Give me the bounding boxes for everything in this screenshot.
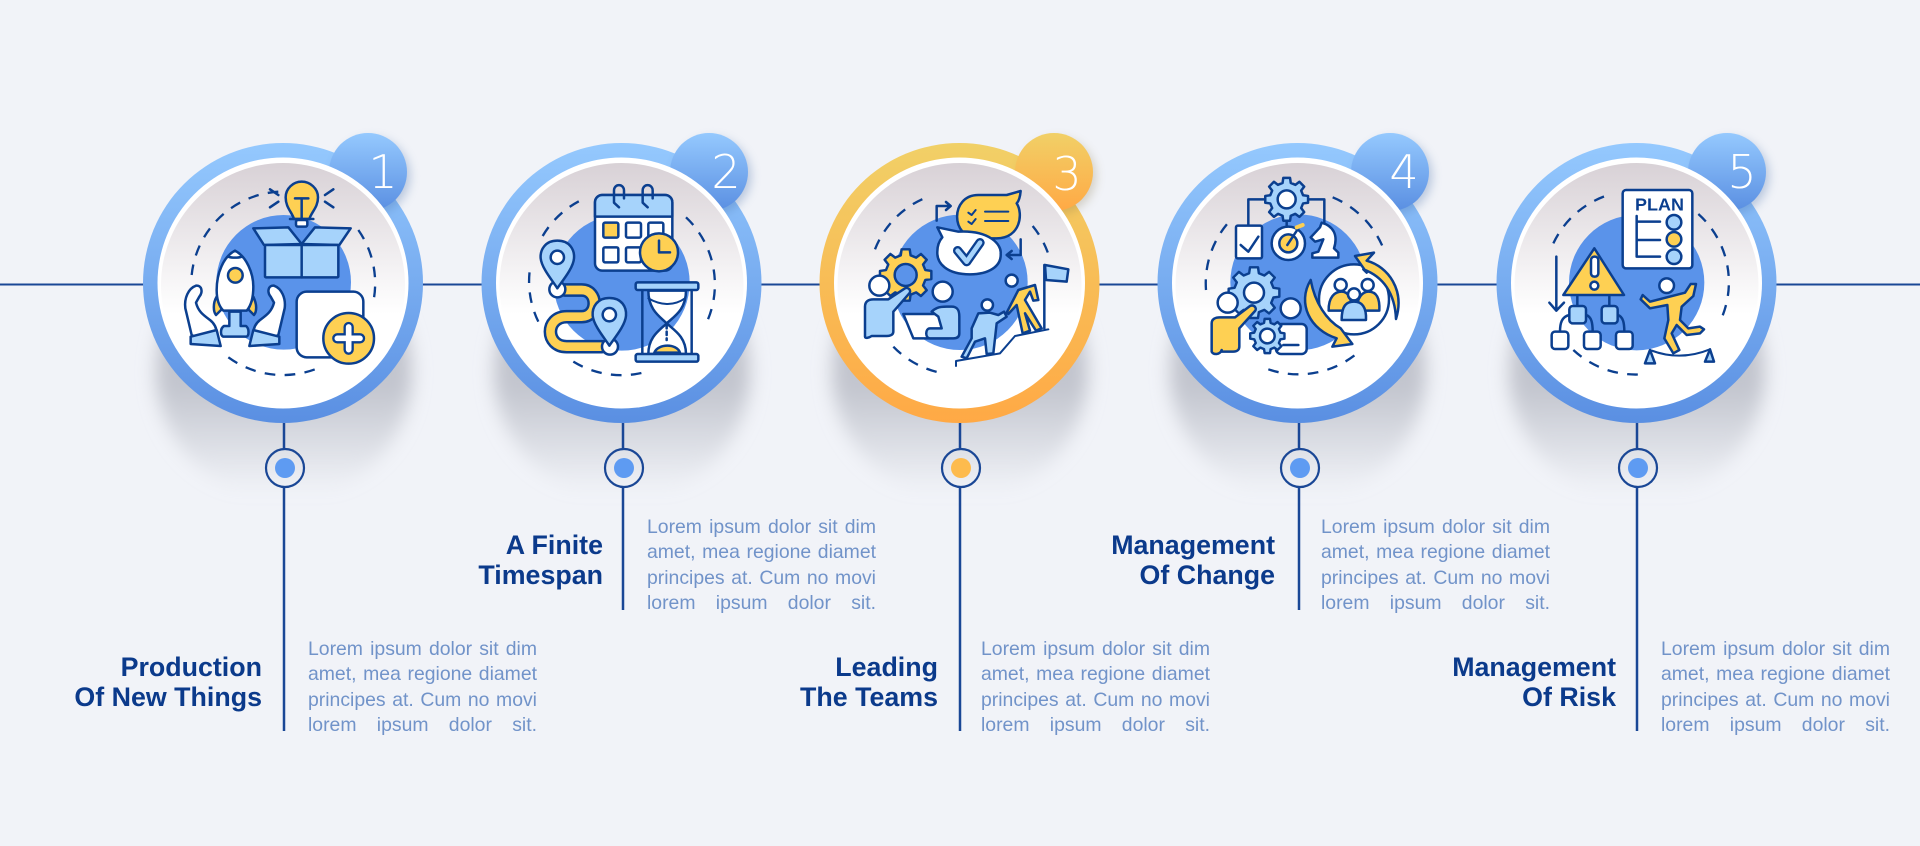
heading: Management Of Change: Management <box>1111 530 1275 560</box>
timeline axis <box>0 284 1920 286</box>
heading: Leading The Teams <box>800 652 938 712</box>
text block: step 5: principes at. Cum no movi <box>1661 689 1890 711</box>
text block: step 5: Lorem ipsum dolor sit dim <box>1661 638 1890 660</box>
heading: A Finite Timespan <box>478 530 603 590</box>
text block: step 5: lorem ipsum dolor sit. <box>1661 714 1890 736</box>
text block: step 2: lorem ipsum dolor sit. <box>647 592 876 614</box>
text block: step 5: amet, mea regione diamet <box>1661 663 1890 685</box>
step 5 node <box>1496 133 1776 731</box>
heading: Leading The Teams: Leading <box>835 652 938 682</box>
number 4: 4 <box>1389 145 1419 199</box>
number 1: 1 <box>368 145 398 199</box>
text block: step 4 <box>1321 516 1550 614</box>
text block: step 1: amet, mea regione diamet <box>308 663 537 685</box>
text block: step 2: amet, mea regione diamet <box>647 541 876 563</box>
icon: risk plan <box>1549 190 1729 375</box>
heading: Production Of New Things <box>74 652 262 712</box>
number 2: 2 <box>711 145 741 199</box>
heading: Leading The Teams: The Teams <box>800 682 938 712</box>
step 2 node <box>482 133 762 610</box>
text block: step 3: Lorem ipsum dolor sit dim <box>981 638 1210 660</box>
heading: A Finite Timespan: Timespan <box>478 560 603 590</box>
heading: Management Of Change <box>1111 530 1275 590</box>
heading: Management Of Risk <box>1452 652 1616 712</box>
icon: new product launch <box>185 182 375 375</box>
heading: Management Of Change: Of Change <box>1140 560 1275 590</box>
icon: calendar, route and hourglass <box>529 185 715 375</box>
heading: Production Of New Things: Production <box>121 652 262 682</box>
step 4 node <box>1158 133 1438 610</box>
number 3: 3 <box>1052 147 1082 201</box>
text block: step 3: principes at. Cum no movi <box>981 689 1210 711</box>
text block: step 1: Lorem ipsum dolor sit dim <box>308 638 537 660</box>
text block: step 4: principes at. Cum no movi <box>1321 567 1550 589</box>
text block: step 3: amet, mea regione diamet <box>981 663 1210 685</box>
heading: Production Of New Things: Of New Things <box>74 682 262 712</box>
heading: Management Of Risk: Management <box>1452 652 1616 682</box>
icon: team leadership <box>865 191 1068 373</box>
text block: step 2 <box>647 516 876 614</box>
text block: step 1: principes at. Cum no movi <box>308 689 537 711</box>
step 3 node <box>820 133 1100 731</box>
plan label: PLAN <box>1635 195 1684 215</box>
text block: step 4: amet, mea regione diamet <box>1321 541 1550 563</box>
text block: step 2: Lorem ipsum dolor sit dim <box>647 516 876 538</box>
text block: step 1 <box>308 638 537 736</box>
number 5: 5 <box>1727 145 1757 199</box>
text block: step 3: lorem ipsum dolor sit. <box>981 714 1210 736</box>
text block: step 4: Lorem ipsum dolor sit dim <box>1321 516 1550 538</box>
text block: step 3 <box>981 638 1210 736</box>
text block: step 5 <box>1661 638 1890 736</box>
icon: change management <box>1206 178 1398 374</box>
text block: step 4: lorem ipsum dolor sit. <box>1321 592 1550 614</box>
step 1 node <box>143 133 423 731</box>
heading: A Finite Timespan: A Finite <box>506 530 603 560</box>
text block: step 2: principes at. Cum no movi <box>647 567 876 589</box>
heading: Management Of Risk: Of Risk <box>1522 682 1616 712</box>
text block: step 1: lorem ipsum dolor sit. <box>308 714 537 736</box>
